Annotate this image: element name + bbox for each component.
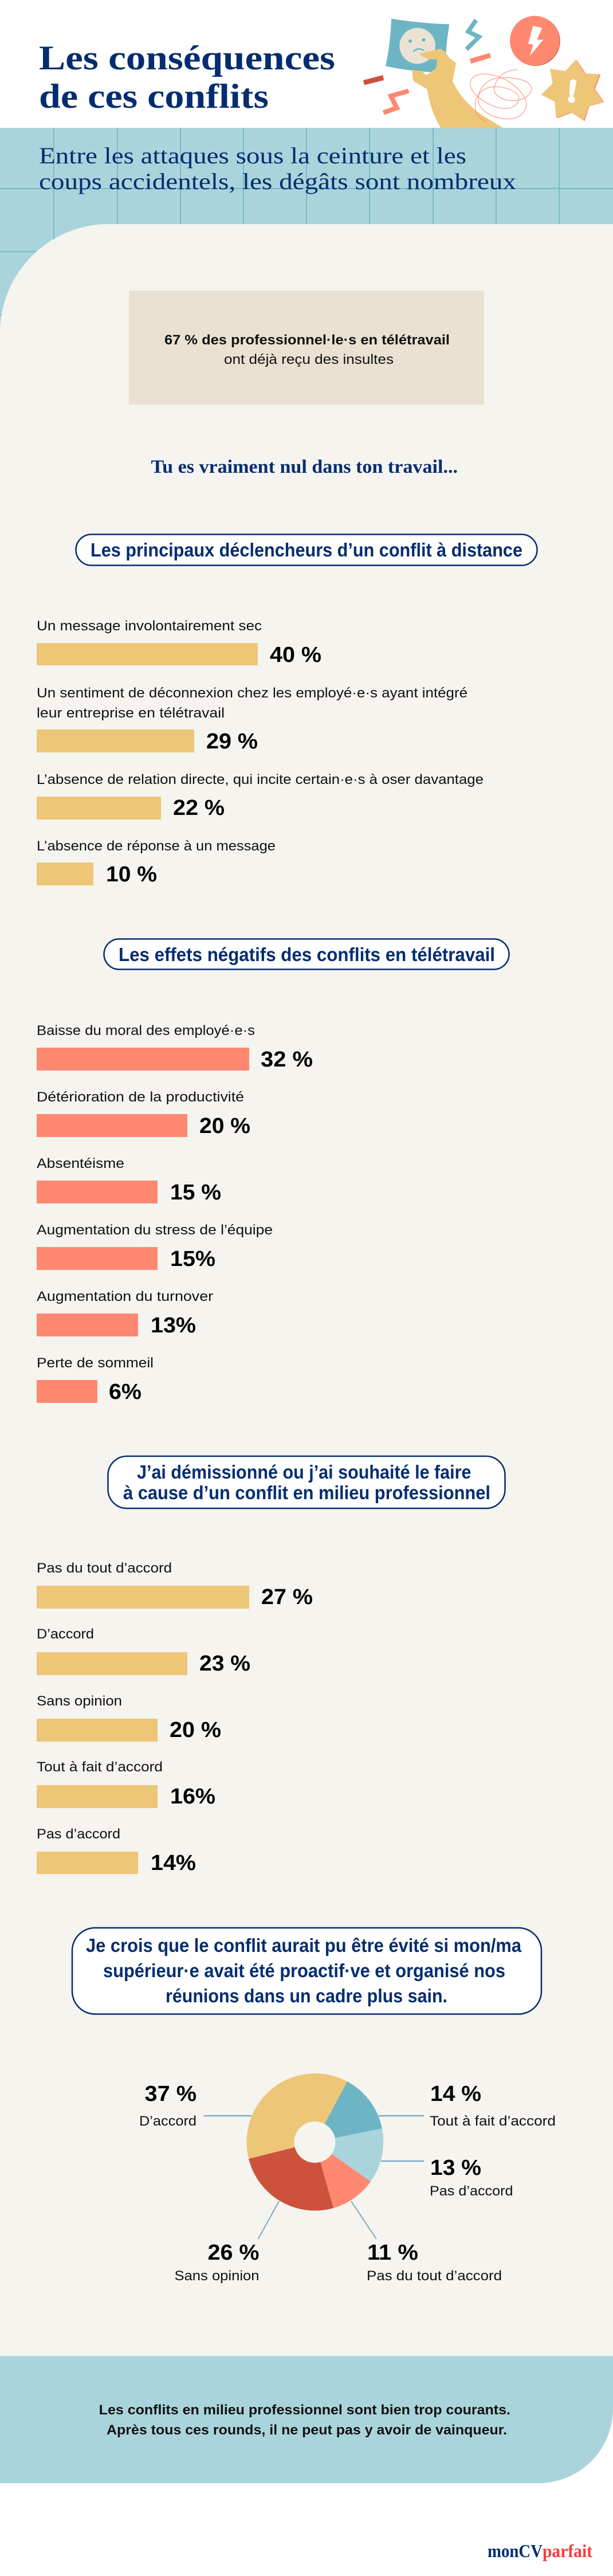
bar: perte de sommeil 6%: Perte de sommeil xyxy=(37,1355,154,1371)
bar: sentiment de déconnexion 29 % xyxy=(37,685,467,754)
subtitle: Entre les attaques sous la ceinture et les xyxy=(39,143,466,168)
bar: stress de l'équipe 15% xyxy=(37,1222,273,1271)
bar: absence de réponse 10 %: L’absence de réponse à un message xyxy=(37,838,276,854)
bar chart: effets négatifs xyxy=(37,1023,313,1404)
heading: conflit évitable: supérieur·e avait été proactif·ve et organisé nos xyxy=(103,1960,505,1981)
label: 11 % pas du tout d'accord: Pas du tout d’accord xyxy=(367,2268,502,2284)
icon: dark red bar xyxy=(363,75,384,85)
heading: conflit évitable xyxy=(72,1928,541,2014)
bar: turnover 13%: 13% xyxy=(151,1314,196,1338)
bar: sentiment de déconnexion 29 %: leur entreprise en télétravail xyxy=(37,705,225,721)
bar: absentéisme 15 % xyxy=(37,1156,221,1205)
bar: message involontairement sec 40 %: Un message involontairement sec xyxy=(37,618,262,634)
label: 37 % d'accord: 37 % xyxy=(144,2082,197,2106)
chart: donut xyxy=(246,2073,383,2210)
label: 14 % tout à fait d'accord xyxy=(430,2082,556,2129)
bar: absence de relation directe 22 %: L’absence de relation directe, qui incite certain·e·s à oser davantage xyxy=(37,772,484,787)
label: 37 % d'accord: D’accord xyxy=(139,2114,197,2129)
bar: stress de l'équipe 15%: 15% xyxy=(170,1247,215,1271)
title xyxy=(39,39,335,115)
panel: closing message: Après tous ces rounds, il ne peut pas y avoir de vainqueur. xyxy=(107,2422,507,2438)
label: 11 % pas du tout d'accord xyxy=(367,2241,502,2284)
icon: sad face paper xyxy=(386,19,449,72)
subtitle: coups accidentels, les dégâts sont nombreux xyxy=(39,168,516,194)
bar: pas d'accord 14% xyxy=(37,1826,196,1875)
panel: closing message xyxy=(0,2356,613,2483)
leader lines xyxy=(204,2116,424,2239)
bar: tout à fait d'accord 16% xyxy=(37,1759,215,1809)
title: de ces conflits xyxy=(39,77,269,115)
bar: sans opinion 20 %: Sans opinion xyxy=(37,1693,122,1709)
panel: closing message: Les conflits en milieu professionnel sont bien trop courants. xyxy=(99,2402,510,2418)
callout: 67 % statistic: ont déjà reçu des insultes xyxy=(224,352,394,367)
bar: d'accord 23 % xyxy=(37,1626,250,1676)
label: 13 % pas d'accord: Pas d’accord xyxy=(430,2183,513,2199)
logo: monCV xyxy=(488,2540,543,2561)
icon: scribble xyxy=(470,70,532,122)
heading: principaux déclencheurs: Les principaux déclencheurs d’un conflit à distance xyxy=(91,539,522,560)
heading: conflit évitable: réunions dans un cadre plus sain. xyxy=(166,1985,447,2006)
logo xyxy=(488,2540,592,2561)
heading: effets négatifs xyxy=(104,939,509,970)
callout: 67 % statistic xyxy=(129,291,484,405)
icon: alert star xyxy=(541,60,604,121)
bar: perte de sommeil 6%: 6% xyxy=(109,1380,142,1404)
illustration: hand holding a sad face, lightning and alert icons xyxy=(363,16,604,128)
heading: principaux déclencheurs xyxy=(76,534,537,565)
bar: sans opinion 20 % xyxy=(37,1693,221,1742)
icon: salmon zigzag xyxy=(383,91,408,113)
bar: sentiment de déconnexion 29 %: Un sentiment de déconnexion chez les employé·e·s ayant intégré xyxy=(37,685,467,701)
label: 14 % tout à fait d'accord: Tout à fait d’accord xyxy=(430,2114,556,2129)
bar: absence de relation directe 22 % xyxy=(37,772,484,820)
bar: productivité 20 %: Détérioration de la productivité xyxy=(37,1089,244,1105)
label: 13 % pas d'accord: 13 % xyxy=(430,2156,481,2180)
icon: lightning badge xyxy=(510,16,560,66)
bar: sans opinion 20 %: 20 % xyxy=(170,1718,221,1742)
bar: pas du tout d'accord 27 %: 27 % xyxy=(261,1585,313,1609)
bar: message involontairement sec 40 %: 40 % xyxy=(270,643,321,667)
label: 26 % sans opinion: 26 % xyxy=(207,2241,259,2265)
callout: 67 % statistic: 67 % des professionnel·le·s en télétravail xyxy=(164,332,450,348)
bar: sentiment de déconnexion 29 %: 29 % xyxy=(206,730,258,754)
label: 26 % sans opinion: Sans opinion xyxy=(174,2268,259,2284)
bar: d'accord 23 %: D’accord xyxy=(37,1626,94,1642)
bar chart: déclencheurs xyxy=(37,618,484,887)
bar: absence de relation directe 22 %: 22 % xyxy=(173,796,225,820)
heading: effets négatifs: Les effets négatifs des conflits en télétravail xyxy=(119,944,495,965)
bar: perte de sommeil 6% xyxy=(37,1355,154,1404)
bar: productivité 20 %: 20 % xyxy=(199,1114,250,1138)
bar: baisse du moral 32 % xyxy=(37,1023,313,1072)
bar: absentéisme 15 %: 15 % xyxy=(170,1181,221,1205)
title: Les conséquences xyxy=(39,39,335,77)
bar: pas d'accord 14%: Pas d’accord xyxy=(37,1826,120,1842)
heading: démission xyxy=(108,1456,505,1508)
heading: démission: à cause d’un conflit en milieu professionnel xyxy=(123,1482,490,1503)
label: 13 % pas d'accord xyxy=(430,2156,513,2199)
bar: baisse du moral 32 %: 32 % xyxy=(261,1048,313,1072)
label: 37 % d'accord xyxy=(139,2082,197,2129)
bar: pas d'accord 14%: 14% xyxy=(151,1851,196,1875)
bar: absence de réponse 10 % xyxy=(37,838,276,887)
label: 11 % pas du tout d'accord: 11 % xyxy=(367,2241,418,2265)
subtitle xyxy=(39,143,516,194)
logo: parfait xyxy=(543,2540,592,2561)
icon: hand xyxy=(412,49,503,128)
bar chart: démission xyxy=(37,1561,313,1875)
bar: absentéisme 15 %: Absentéisme xyxy=(37,1156,124,1171)
bar: tout à fait d'accord 16%: Tout à fait d’accord xyxy=(37,1759,163,1775)
label: 14 % tout à fait d'accord: 14 % xyxy=(430,2082,481,2106)
bar: stress de l'équipe 15%: Augmentation du stress de l’équipe xyxy=(37,1222,273,1238)
bar: turnover 13%: Augmentation du turnover xyxy=(37,1289,213,1304)
icon: teal zigzag xyxy=(466,20,479,49)
quote: Tu es vraiment nul dans ton travail... xyxy=(151,457,458,477)
bar: turnover 13% xyxy=(37,1289,213,1338)
bar: productivité 20 % xyxy=(37,1089,250,1138)
heading: démission: J’ai démissionné ou j’ai souhaité le faire xyxy=(137,1461,471,1483)
panel: blue header band with grid xyxy=(0,128,613,340)
bar: tout à fait d'accord 16%: 16% xyxy=(170,1785,215,1809)
bar: d'accord 23 %: 23 % xyxy=(199,1652,250,1676)
bar: pas du tout d'accord 27 % xyxy=(37,1561,313,1609)
bar: message involontairement sec 40 % xyxy=(37,618,321,667)
label: 26 % sans opinion xyxy=(174,2241,259,2284)
bar: pas du tout d'accord 27 %: Pas du tout d’accord xyxy=(37,1561,172,1576)
icon: salmon bar xyxy=(470,53,491,64)
heading: conflit évitable: Je crois que le conflit aurait pu être évité si mon/ma xyxy=(86,1935,522,1956)
bar: absence de réponse 10 %: 10 % xyxy=(106,862,157,887)
bar: baisse du moral 32 %: Baisse du moral des employé·e·s xyxy=(37,1023,255,1038)
